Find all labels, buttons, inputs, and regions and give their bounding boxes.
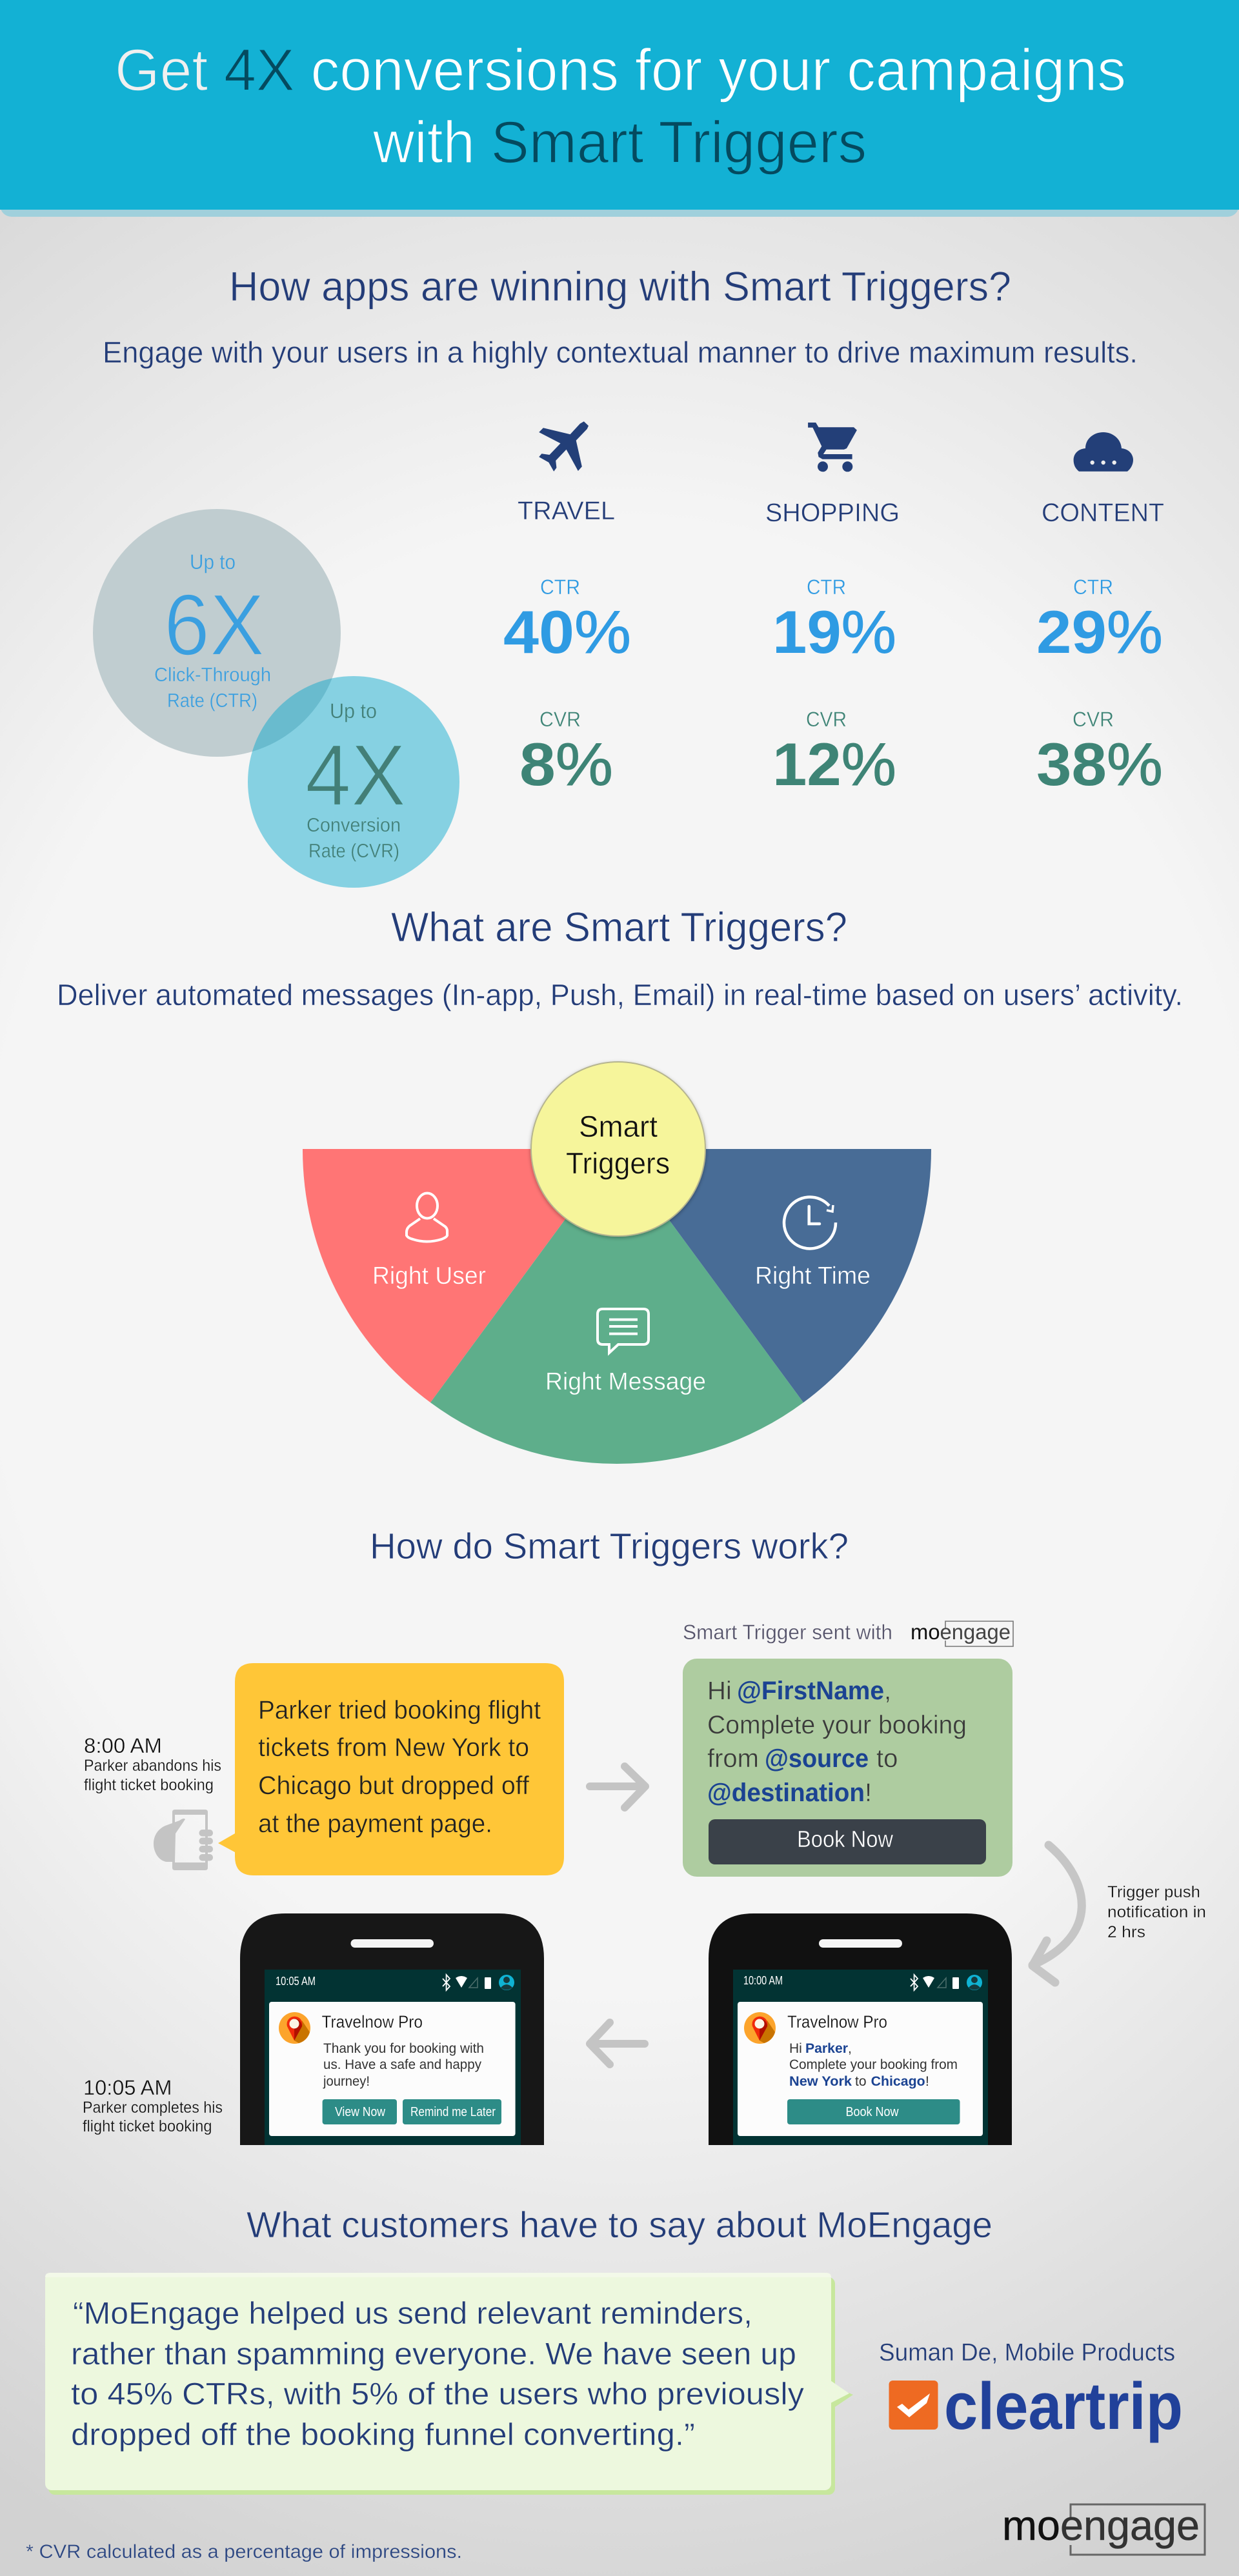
icon: user xyxy=(407,1193,447,1241)
segment: right user xyxy=(303,1149,617,1403)
panel: yellow story bubble: Parker tried booking flight xyxy=(258,1696,541,1724)
phone: booking confirmed: Thank you for booking with xyxy=(323,2041,484,2056)
circle: 4X CVR xyxy=(248,676,459,888)
stat: travel CTR: CTR xyxy=(540,575,580,599)
arrow: curved trigger push xyxy=(1032,1845,1082,1982)
overlapping uplift circles xyxy=(93,509,459,888)
stat: travel CTR: 40% xyxy=(503,598,631,666)
circle: 6X CTR: Up to xyxy=(190,550,236,574)
caption: trigger push notification: Trigger push xyxy=(1107,1883,1200,1901)
panel: customer quote: “MoEngage helped us send relevant reminders, xyxy=(73,2297,752,2331)
phone: notification sent xyxy=(709,1913,1012,2145)
column: shopping xyxy=(765,423,900,798)
heading: how apps are winning: How apps are winning with Smart Triggers? xyxy=(229,263,1011,310)
caption: trigger push notification: 2 hrs xyxy=(1107,1923,1145,1941)
stat: travel CVR: CVR xyxy=(539,708,581,731)
logo: moengage: moengage xyxy=(1002,2502,1200,2549)
caption: trigger push notification: notification in xyxy=(1107,1903,1206,1921)
button: book now xyxy=(787,2099,960,2124)
panel: customer quote: dropped off the booking funnel converting.” xyxy=(71,2418,695,2452)
panel: yellow story bubble: Chicago but dropped off xyxy=(258,1772,530,1800)
button: view now xyxy=(323,2099,397,2124)
attribution: suman de: Suman De, Mobile Products xyxy=(879,2339,1175,2366)
phone: notification sent: New York xyxy=(789,2074,852,2089)
panel: yellow story bubble: tickets from New York to xyxy=(258,1733,529,1762)
circle: 4X CVR: Rate (CVR) xyxy=(308,839,399,862)
panel: trigger message template: @destination xyxy=(707,1779,865,1807)
stat: shopping CVR: CVR xyxy=(806,708,847,731)
semicircle diagram xyxy=(303,1062,931,1464)
step: 8:00 AM caption: Parker abandons his xyxy=(84,1757,221,1775)
label: content: CONTENT xyxy=(1042,499,1164,527)
column: content xyxy=(1036,432,1164,798)
step: 10:05 AM caption: flight ticket booking xyxy=(83,2117,212,2135)
subheading: deliver: Deliver automated messages (In-app, Push, Email) in real-time based on users’ activity. xyxy=(57,978,1183,1012)
panel: trigger message template: @source xyxy=(765,1744,869,1773)
icon: cart xyxy=(808,423,857,472)
icon: message xyxy=(598,1309,649,1353)
heading: what are smart triggers: What are Smart Triggers? xyxy=(391,904,847,950)
panel: yellow story bubble xyxy=(218,1663,564,1875)
panel: trigger message template: Hi xyxy=(707,1677,732,1705)
icon: hand holding phone xyxy=(154,1810,213,1870)
icon: cloud xyxy=(1074,432,1133,472)
label: smart trigger sent with moengage: Smart Trigger sent with xyxy=(683,1621,892,1644)
label: right message: Right Message xyxy=(545,1368,706,1395)
heading: what customers have to say: What customers have to say about MoEngage xyxy=(247,2204,992,2246)
step: 10:05 AM caption: 10:05 AM xyxy=(83,2076,172,2099)
logo: moengage small: moengage xyxy=(911,1620,1011,1644)
phone: notification sent: Hi xyxy=(789,2041,802,2056)
hub: smart triggers xyxy=(531,1062,705,1236)
header banner xyxy=(0,0,1239,217)
phone: notification sent: Chicago xyxy=(871,2074,925,2089)
subheading: engage: Engage with your users in a highly contextual manner to drive maximum results. xyxy=(103,335,1138,369)
circle: 4X CVR: Up to xyxy=(330,699,377,723)
hub: smart triggers: Smart xyxy=(579,1110,658,1143)
phone: booking confirmed xyxy=(240,1913,544,2145)
panel: trigger message template xyxy=(683,1659,1012,1877)
footnote: * CVR calculated as a percentage of impressions. xyxy=(26,2541,462,2562)
segment: right message xyxy=(430,1149,803,1464)
stat: travel CVR: 8% xyxy=(519,730,613,798)
phone: notification sent: , xyxy=(848,2041,852,2056)
button: book now: Book Now xyxy=(845,2105,899,2119)
panel: trigger message template: from xyxy=(707,1744,759,1773)
panel: customer quote xyxy=(45,2273,853,2495)
panel: trigger message template: , xyxy=(884,1677,891,1705)
stat: content CTR: 29% xyxy=(1036,598,1163,666)
circle: 6X CTR: 6X xyxy=(164,576,265,674)
stat: shopping CTR: CTR xyxy=(807,575,846,599)
panel: customer quote: rather than spamming everyone. We have seen up xyxy=(71,2337,796,2371)
step: 8:00 AM caption: flight ticket booking xyxy=(84,1776,214,1794)
hub: smart triggers: Triggers xyxy=(566,1146,670,1180)
circle: 6X CTR: Click-Through xyxy=(154,663,271,686)
phone: notification sent: Parker xyxy=(805,2041,848,2056)
icon: travel app pin xyxy=(279,2012,310,2044)
icon: status bar xyxy=(911,1975,982,1990)
title: with Smart Triggers xyxy=(372,110,867,175)
label: travel: TRAVEL xyxy=(518,497,615,525)
heading: how do smart triggers work: How do Smart Triggers work? xyxy=(370,1526,849,1567)
circle: 6X CTR xyxy=(93,509,341,757)
circle: 4X CVR: Conversion xyxy=(307,814,401,836)
button: remind me later xyxy=(403,2099,501,2124)
stat: content CVR: CVR xyxy=(1073,708,1114,731)
title: Get 4X conversions for your campaigns xyxy=(115,37,1126,103)
stat: content CVR: 38% xyxy=(1036,730,1163,798)
phone: notification sent: Complete your booking from xyxy=(789,2057,958,2072)
label: shopping: SHOPPING xyxy=(765,499,900,527)
panel: yellow story bubble: at the payment page. xyxy=(258,1810,492,1838)
icon: plane xyxy=(539,421,589,472)
step: 10:05 AM caption: Parker completes his xyxy=(83,2099,223,2117)
label: right user: Right User xyxy=(372,1263,486,1290)
phone: notification sent: to xyxy=(855,2074,867,2089)
column: travel xyxy=(503,421,631,798)
phone: booking confirmed: Travelnow Pro xyxy=(321,2012,423,2032)
step: 8:00 AM caption: 8:00 AM xyxy=(84,1734,162,1757)
circle: 4X CVR: 4X xyxy=(305,726,406,824)
button: book now xyxy=(709,1819,986,1864)
phone: booking confirmed: us. Have a safe and happy xyxy=(323,2057,481,2072)
arrow: left xyxy=(590,2022,645,2064)
stat: content CTR: CTR xyxy=(1073,575,1113,599)
panel: trigger message template: @FirstName xyxy=(737,1677,884,1705)
stat: shopping CTR: 19% xyxy=(772,598,896,666)
button: book now: Book Now xyxy=(797,1826,894,1852)
arrow: right xyxy=(590,1766,645,1808)
stat: shopping CVR: 12% xyxy=(772,730,896,798)
label: smart trigger sent with moengage xyxy=(683,1620,1013,1646)
phone: booking confirmed: journey! xyxy=(323,2074,370,2089)
button: remind me later: Remind me Later xyxy=(410,2105,496,2119)
circle: 6X CTR: Rate (CTR) xyxy=(167,689,257,712)
panel: customer quote: to 45% CTRs, with 5% of the users who previously xyxy=(71,2377,804,2411)
panel: trigger message template: ! xyxy=(865,1779,872,1807)
icon: clock xyxy=(784,1197,836,1248)
label: right time: Right Time xyxy=(755,1263,871,1290)
caption: trigger push notification xyxy=(1107,1883,1206,1941)
logo: cleartrip: cleartrip xyxy=(944,2369,1183,2443)
phone: booking confirmed: 10:05 AM xyxy=(276,1975,316,1988)
step: 10:05 AM caption xyxy=(83,2076,223,2135)
panel: trigger message template: to xyxy=(876,1744,898,1773)
phone: notification sent: 10:00 AM xyxy=(743,1974,783,1987)
phone: notification sent: ! xyxy=(925,2074,929,2089)
step: 8:00 AM caption xyxy=(84,1734,221,1794)
segment: right time xyxy=(617,1149,931,1403)
button: view now: View Now xyxy=(335,2105,385,2119)
panel: trigger message template: Complete your booking xyxy=(707,1711,967,1739)
icon: status bar xyxy=(443,1975,514,1990)
phone: notification sent: Travelnow Pro xyxy=(787,2012,887,2032)
icon: travel app pin xyxy=(744,2012,776,2044)
title xyxy=(115,37,1126,175)
